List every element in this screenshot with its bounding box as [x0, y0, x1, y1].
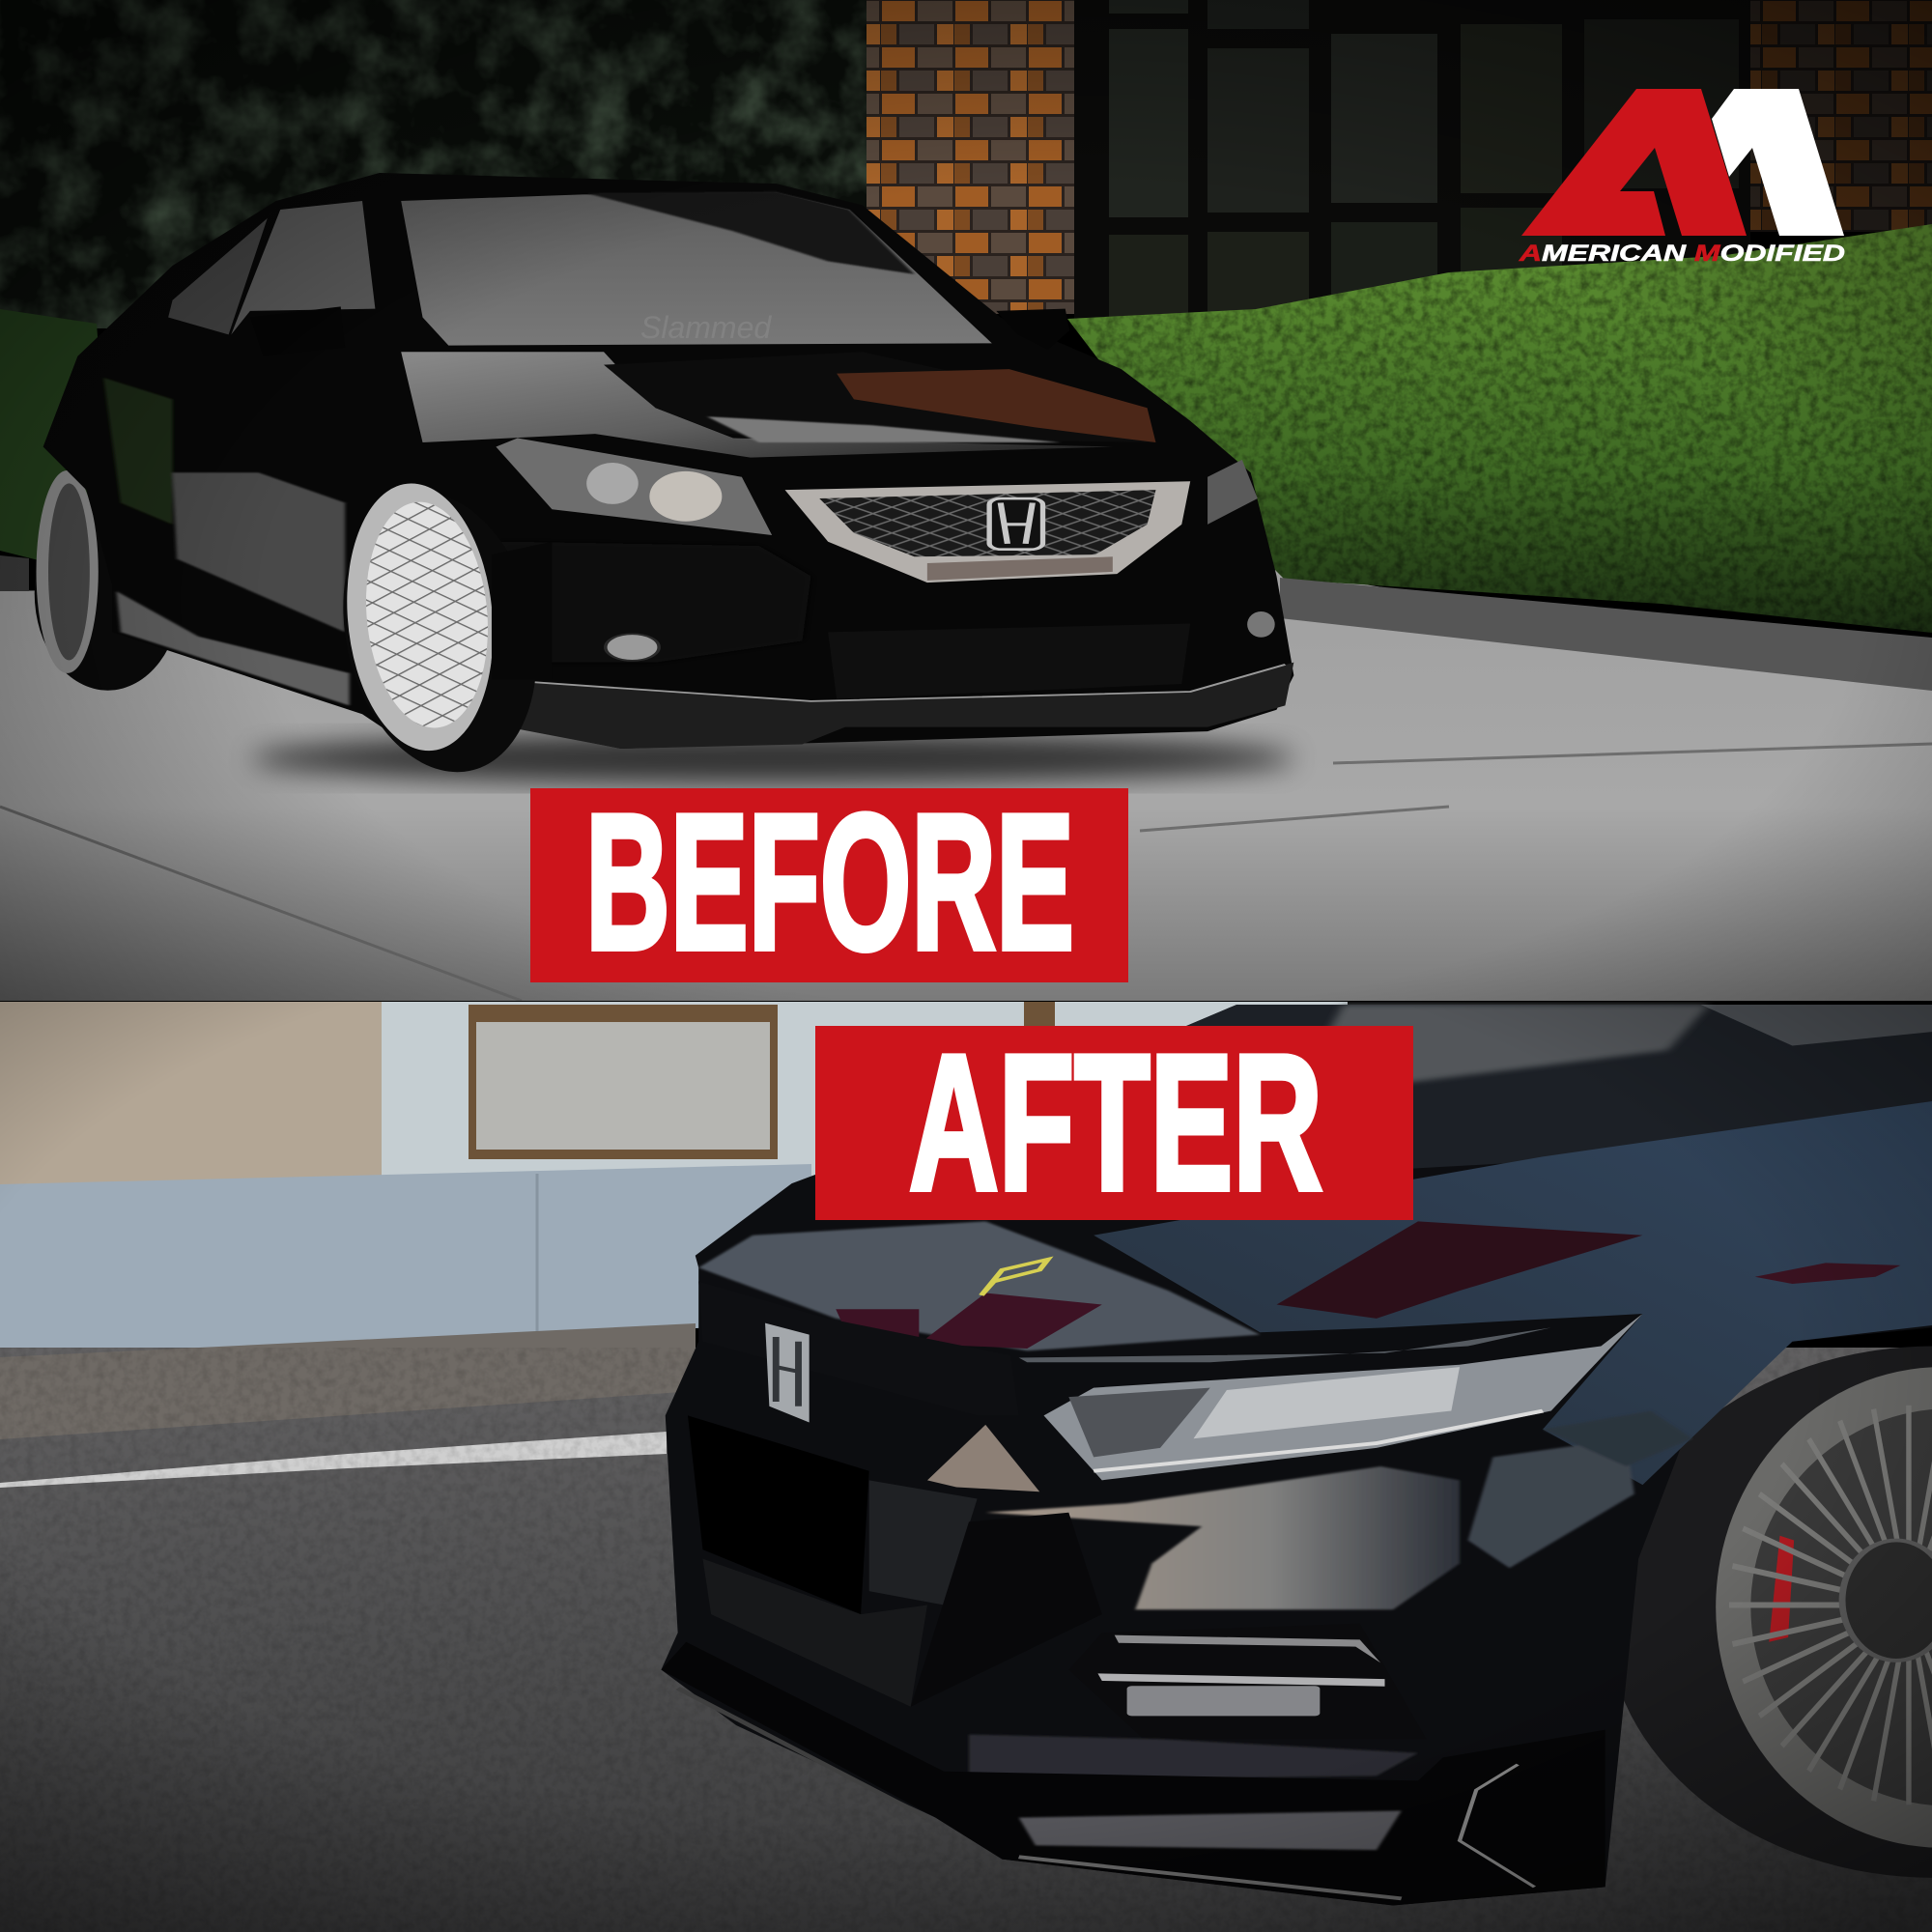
vignette: [0, 1002, 1932, 1932]
car body: [43, 173, 1293, 766]
honda emblem: [765, 1323, 810, 1423]
gutter: [0, 1323, 696, 1439]
logo mark red A: [1521, 89, 1747, 236]
left hedge: [0, 309, 98, 560]
chrome grille accent: [927, 1425, 1039, 1492]
wheel: [1605, 1347, 1932, 1878]
road: [0, 1348, 1932, 1932]
door panel reflections: [103, 378, 350, 705]
vignette: [0, 0, 1932, 1001]
front lip: [492, 663, 1293, 749]
curb: [1280, 578, 1932, 691]
hood: [1094, 1101, 1932, 1485]
headlight: [496, 439, 772, 535]
road line: [0, 1432, 667, 1488]
banner: after: [815, 1015, 1413, 1231]
car body: [661, 1005, 1932, 1906]
road texture: [0, 1348, 1932, 1932]
right brick wall: [1750, 0, 1932, 232]
before label: BEFORE: [585, 775, 1074, 990]
front bumper edge over tyre: [492, 542, 552, 680]
front splitter: [661, 1642, 1605, 1906]
right fog light: [1247, 611, 1275, 638]
front fender reflection: [985, 1411, 1692, 1609]
wall seam: [535, 1174, 539, 1331]
car: before: [35, 173, 1293, 776]
car shadow: [251, 733, 1294, 783]
left fog light: [606, 634, 659, 661]
beige wall: [0, 1002, 386, 1185]
lower intake: [828, 624, 1190, 699]
after label: AFTER: [909, 1015, 1322, 1231]
right wing mirror: [997, 309, 1066, 314]
headlight: [1043, 1314, 1642, 1480]
ground cracks: [0, 744, 1932, 1001]
front wheel: [326, 482, 554, 776]
wheel hub: [1842, 1541, 1932, 1661]
brake caliper: [1769, 1536, 1794, 1642]
licence plate block: [688, 1415, 869, 1614]
panel: after photo: [0, 1002, 1932, 1932]
white building wall: [382, 1002, 1348, 1180]
roof sticker: [1701, 1005, 1932, 1046]
panel: before photo: [0, 0, 1932, 1001]
hood front band: [698, 1221, 1551, 1415]
brick pillar: [867, 0, 1074, 314]
hood: [401, 352, 1155, 458]
rear wheel: [35, 470, 182, 691]
logo wordmark: AMERICAN M ODIFIED: [1519, 241, 1845, 267]
windshield: [401, 191, 992, 346]
front bumper reflections: [500, 542, 810, 663]
car: after: [661, 1005, 1932, 1906]
roof and windshield: [985, 1005, 1932, 1179]
grille: [785, 481, 1190, 582]
upper lip reflection: [969, 1734, 1418, 1780]
building window: [469, 1002, 1055, 1159]
foliage background: [0, 0, 869, 328]
lower grille: [702, 1559, 927, 1707]
windshield watermark: Slammed: [640, 310, 772, 345]
honda emblem: [989, 498, 1043, 550]
fog light housing: [1068, 1624, 1427, 1739]
logo mark white M stroke: [1712, 89, 1844, 236]
blue wall base: [0, 1164, 811, 1357]
windshield reflection: [1293, 1005, 1709, 1096]
banner: before: [530, 775, 1128, 990]
right headlight: [1208, 460, 1258, 525]
wheel spokes: [1729, 1406, 1932, 1804]
side windows: [168, 201, 375, 334]
ground: [0, 570, 1932, 1001]
bumper dark corner: [911, 1513, 1102, 1707]
logo: American Modified: [1519, 89, 1845, 267]
right hedge: [1067, 224, 1932, 633]
wing mirror: [312, 306, 341, 310]
building window: [1074, 0, 1750, 328]
